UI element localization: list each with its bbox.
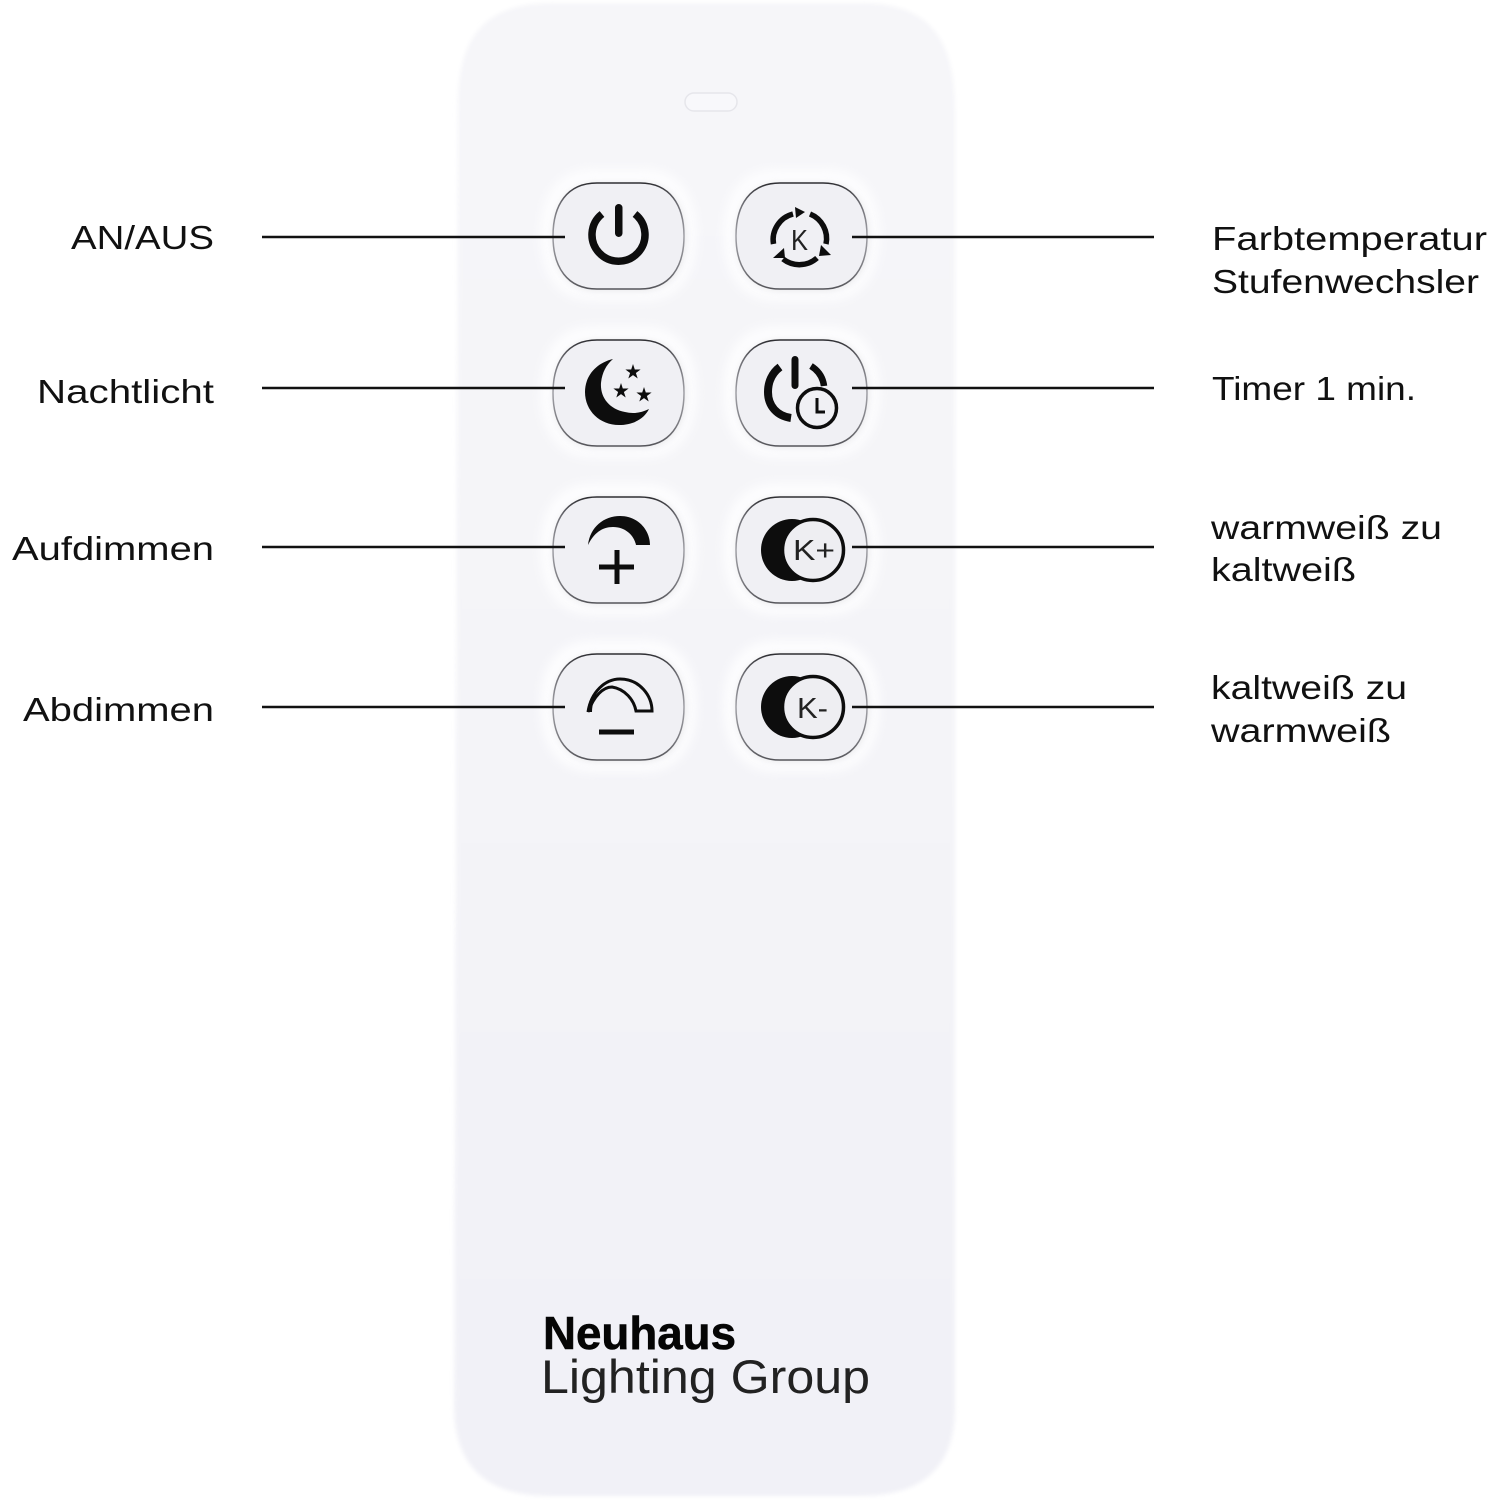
button: power [540,169,697,301]
status LED [685,93,737,111]
label: Farbtemperatur Stufenwechsler: Stufenwechsler [1212,263,1479,300]
brand logo [541,1307,870,1403]
label: AN/AUS: AN/AUS [71,219,214,256]
leader line: kaltweiß zu warmweiß [852,706,1154,708]
label: warmweiß zu kaltweiß: kaltweiß [1211,551,1356,588]
button: dim up [540,483,697,615]
icon: dim up arc and plus [588,516,650,584]
label: kaltweiß zu warmweiß: kaltweiß zu [1211,669,1407,706]
brand logo: Lighting Group [541,1350,870,1403]
label: Nachtlicht: Nachtlicht [37,373,214,410]
remote control body [454,3,955,1496]
button: cold to warm [723,640,880,772]
brand logo: Neuhaus [543,1307,736,1359]
label: warmweiß zu kaltweiß: warmweiß zu [1210,509,1442,546]
label: kaltweiß zu warmweiß: warmweiß [1210,712,1391,749]
icon: K minus circles: K- [797,693,828,725]
label: warmweiß zu kaltweiß [1210,509,1442,588]
icon: power [592,204,645,261]
icon: K minus circles [761,676,844,738]
icon: K plus circles: K+ [793,535,835,567]
leader line: Abdimmen [262,706,565,708]
icon: K cycle [773,207,831,265]
icon: dim down arc and minus [587,679,652,734]
button: colour temperature cycle [723,169,880,301]
label: Aufdimmen: Aufdimmen [12,530,214,567]
label: Farbtemperatur Stufenwechsler [1212,220,1487,300]
icon: moon and stars [585,359,652,425]
label: Farbtemperatur Stufenwechsler: Farbtemperatur [1212,220,1487,257]
icon: K plus circles [761,519,844,581]
icon: timer power with clock [768,356,836,428]
button: dim down [540,640,697,772]
button: warm to cold [723,483,880,615]
leader line: Nachtlicht [262,387,565,389]
button: timer [723,326,880,458]
label: Timer 1 min.: Timer 1 min. [1212,370,1416,407]
label: kaltweiß zu warmweiß [1210,669,1407,749]
label: Abdimmen: Abdimmen [23,691,214,728]
button: night light [540,326,697,458]
icon: K cycle: K [791,225,809,257]
leader line: warmweiß zu kaltweiß [852,546,1154,548]
leader line: Farbtemperatur [852,236,1154,238]
leader line: Aufdimmen [262,546,565,548]
leader line: Timer [852,387,1154,389]
leader line: AN/AUS [262,236,565,238]
